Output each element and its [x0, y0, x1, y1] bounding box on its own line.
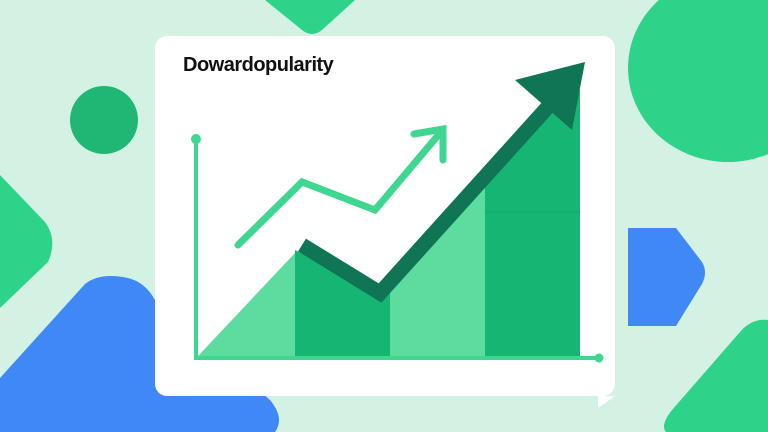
- arrow: light green trend: [238, 129, 443, 245]
- card tail: [598, 396, 615, 408]
- title: Dowardopularity: [183, 54, 333, 76]
- panel: chart card: [155, 36, 615, 396]
- axes: [191, 134, 604, 362]
- shape: top diamond: [265, 0, 355, 34]
- shape: left circle: [70, 86, 138, 154]
- shape: right blue: [628, 228, 705, 326]
- shape: left green rounded: [0, 175, 52, 308]
- bars / area fills: [198, 90, 580, 356]
- shape: bottom-left blue: [0, 276, 279, 432]
- arrow: dark green trend: [302, 62, 585, 293]
- shape: bottom-right green: [664, 320, 768, 432]
- shape: right big circle: [628, 0, 768, 162]
